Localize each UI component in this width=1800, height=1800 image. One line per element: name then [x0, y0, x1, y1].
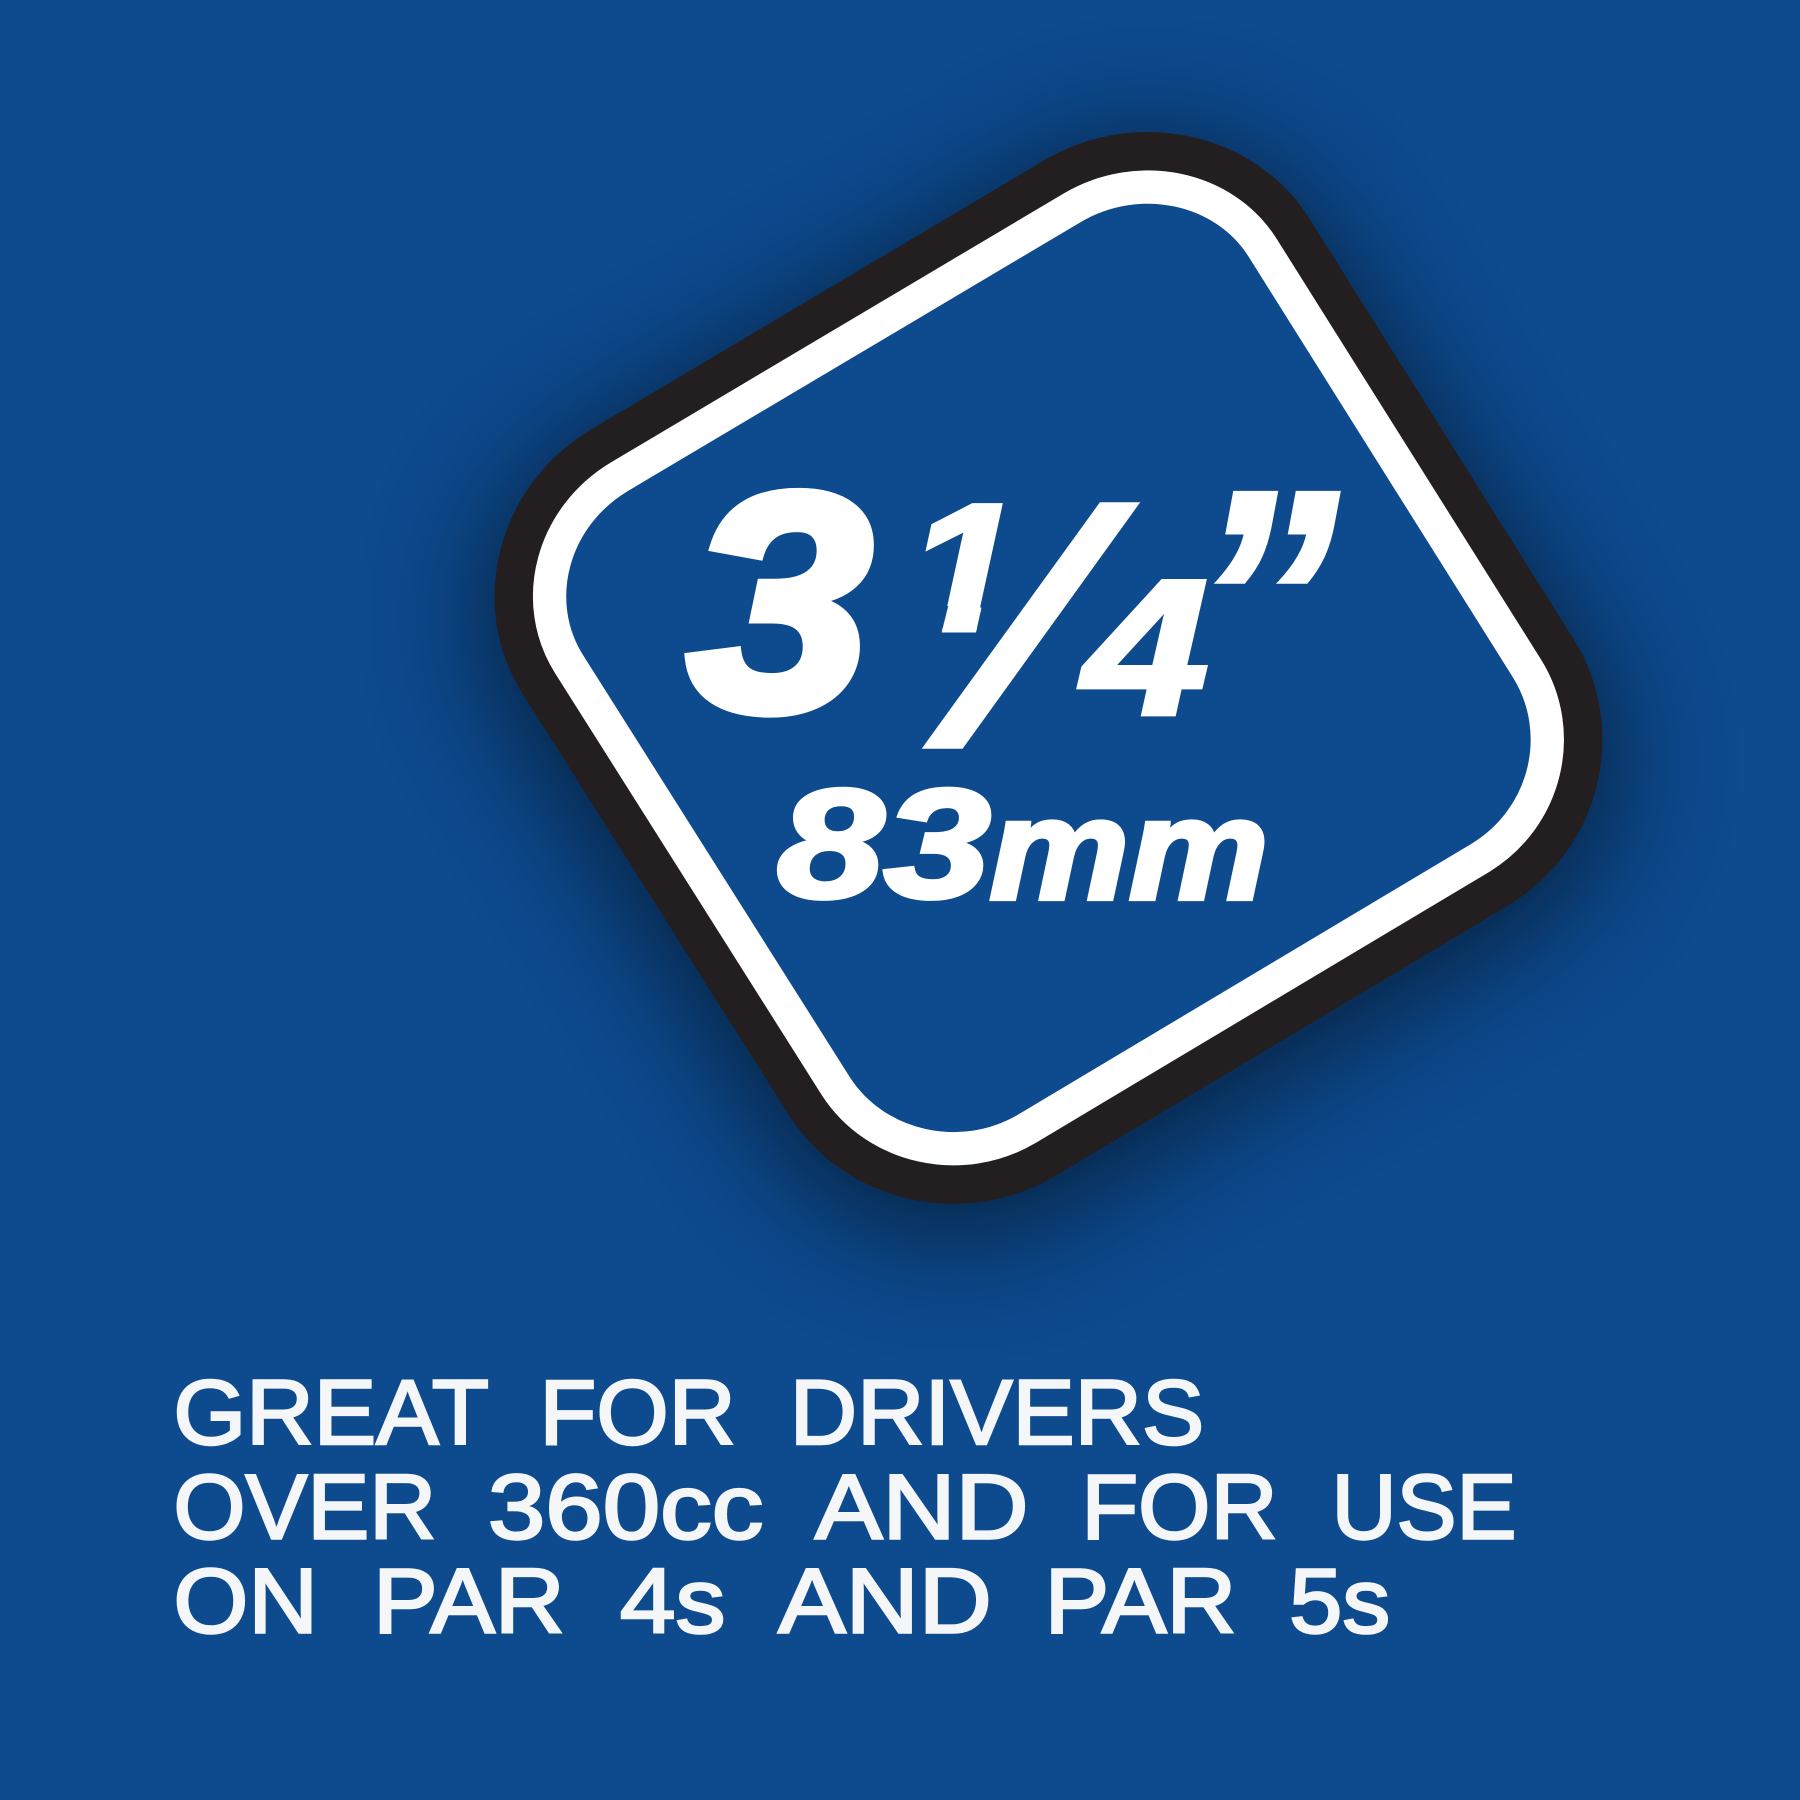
badge white inner ring — [550, 187, 1547, 1149]
line 3: AND — [778, 1550, 992, 1652]
inch mark: ” — [1190, 425, 1339, 779]
line 3: ON — [173, 1550, 318, 1652]
line 2 — [173, 1456, 1516, 1558]
badge black outer ring — [550, 187, 1547, 1149]
fraction denominator 4: 4 — [1079, 540, 1209, 755]
line 2: FOR — [1081, 1456, 1278, 1558]
line 2: OVER — [173, 1456, 436, 1558]
line 3: PAR — [373, 1550, 565, 1652]
line 3: 4s — [620, 1550, 726, 1652]
size in millimetres: 83 — [777, 757, 991, 930]
fraction slash: / — [898, 445, 1162, 812]
line 1: FOR — [540, 1362, 736, 1464]
size in inches: 3 1/4 — [684, 488, 1341, 749]
line 2: USE — [1332, 1456, 1516, 1558]
whole number 3: 3 — [688, 429, 872, 776]
line 1: DRIVERS — [790, 1362, 1204, 1464]
line 3 — [173, 1550, 1390, 1652]
line 1: GREAT — [173, 1362, 489, 1464]
badge: rotated rounded square — [550, 187, 1547, 1149]
line 3: PAR — [1045, 1550, 1236, 1652]
line 2: AND — [815, 1456, 1029, 1558]
size in millimetres: mm — [990, 770, 1268, 930]
line 3: 5s — [1289, 1550, 1390, 1652]
line 1 — [173, 1362, 1204, 1464]
description text — [173, 1362, 1516, 1652]
line 2: 360cc — [488, 1456, 763, 1558]
fraction numerator 1: 1 — [907, 466, 1020, 669]
size in millimetres — [777, 757, 1268, 930]
drop shadow behind badge — [550, 208, 1547, 1169]
